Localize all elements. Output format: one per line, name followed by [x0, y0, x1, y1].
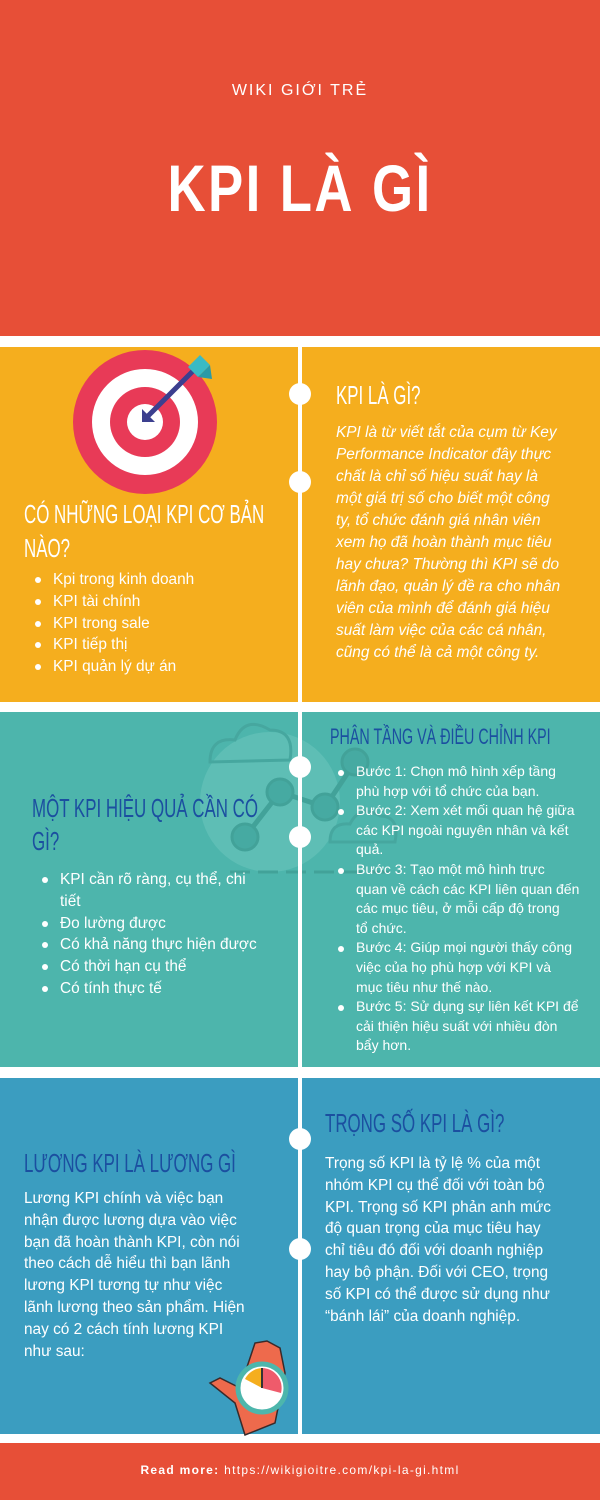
text: lương KPI: nay có 2 cách tính lương KPI — [24, 1321, 223, 1338]
list: steps: phù hợp với tổ chức của bạn. — [356, 783, 539, 799]
list: steps: các KPI ngoài nguyên nhân và kết — [356, 822, 568, 838]
heading: KPI là gì: KPI LÀ GÌ? — [336, 380, 421, 410]
icon: target — [73, 350, 217, 494]
list: loại KPI: Kpi trong kinh doanh — [53, 571, 194, 588]
heading: trọng số: TRỌNG SỐ KPI LÀ GÌ? — [325, 1108, 504, 1138]
list: loại KPI: KPI tài chính — [53, 593, 140, 610]
list: steps: Bước 4: Giúp mọi người thấy công — [356, 939, 572, 955]
list: steps: Bước 5: Sử dụng sự liên kết KPI để — [356, 998, 579, 1014]
text: lương KPI: Lương KPI chính và việc bạn — [24, 1190, 223, 1207]
list: steps: các mục tiêu, ở mỗi cấp độ trong — [356, 900, 560, 916]
list: KPI hiệu quả: Có tính thực tế — [60, 980, 162, 997]
icon: faint cloud network — [200, 723, 400, 874]
text: definition — [335, 423, 560, 661]
heading: lương KPI: LƯƠNG KPI LÀ LƯƠNG GÌ — [24, 1148, 236, 1178]
heading: KPI hiệu quả: MỘT KPI HIỆU QUẢ CẦN CÓ — [32, 793, 258, 823]
text: lương KPI: nhận được lương dựa vào việc — [24, 1212, 237, 1229]
panel: yellow — [0, 347, 600, 702]
header — [0, 0, 600, 336]
list: KPI hiệu quả: Có thời hạn cụ thể — [60, 958, 186, 975]
list: KPI hiệu quả — [42, 871, 257, 997]
list: steps: Bước 2: Xem xét mối quan hệ giữa — [356, 802, 575, 818]
heading: KPI hiệu quả: GÌ? — [32, 826, 59, 856]
list: steps: bẩy hơn. — [356, 1037, 411, 1053]
text: lương KPI: theo cách dễ hiểu thì bạn lãnh — [24, 1255, 230, 1272]
footer — [0, 1443, 600, 1500]
text: definition: viên của mình để đánh giá hiệu — [336, 600, 550, 617]
heading: KPI hiệu quả — [32, 793, 258, 856]
subtitle: WIKI GIỚI TRẺ — [232, 82, 368, 99]
text: trọng số: nhóm KPI cụ thể đối với toàn bộ — [325, 1177, 545, 1194]
title: KPI LÀ GÌ — [167, 151, 433, 225]
text: lương KPI: như sau: — [24, 1343, 85, 1360]
text: trọng số: chỉ tiêu đó đối với doanh nghiệp — [325, 1242, 543, 1259]
list: steps: cải thiện hiệu suất với nhiều đòn — [356, 1018, 557, 1034]
list: steps: mục tiêu như thế nào. — [356, 979, 492, 995]
panel: teal — [0, 712, 600, 1067]
footer link text: Read more: https://wikigioitre.com/kpi-la-gi.html — [140, 1463, 460, 1477]
text: lương KPI: bạn đã hoàn thành KPI, còn nói — [24, 1234, 240, 1251]
text: trọng số: Trọng số KPI là tỷ lệ % của một — [325, 1155, 540, 1172]
list: steps: Bước 1: Chọn mô hình xếp tầng — [356, 763, 556, 779]
list: loại KPI: KPI trong sale — [53, 615, 150, 632]
text: trọng số: hay bộ phận. Đối với CEO, trọng — [325, 1264, 548, 1281]
heading: phân tầng: PHÂN TẦNG VÀ ĐIỀU CHỈNH KPI — [330, 724, 551, 749]
list: KPI hiệu quả: Có khả năng thực hiện được — [60, 936, 257, 953]
list: KPI hiệu quả: KPI cần rõ ràng, cụ thể, chi — [60, 871, 246, 888]
list: steps: Bước 3: Tạo một mô hình trực — [356, 861, 545, 877]
heading: loại KPI: CÓ NHỮNG LOẠI KPI CƠ BẢN — [24, 499, 264, 529]
text: definition: chất là chỉ số hiệu suất hay là — [336, 468, 538, 485]
list: steps: việc của họ phù hợp với KPI và — [356, 959, 551, 975]
text: lương KPI: lãnh lương theo sản phẩm. Hiện — [24, 1299, 245, 1316]
text: trọng số: số KPI có thể được sử dụng như — [325, 1286, 550, 1303]
text: trọng số — [325, 1155, 551, 1325]
text: definition: lãnh đạo, quản lý đề ra cho nhân — [336, 578, 560, 595]
heading: loại KPI: NÀO? — [24, 533, 70, 563]
text: definition: KPI là từ viết tắt của cụm từ Key — [336, 424, 557, 441]
list: loại KPI: KPI quản lý dự án — [53, 658, 176, 675]
text: trọng số: “bánh lái” của doanh nghiệp. — [325, 1308, 520, 1325]
text: definition: cũng có thể là cả một công ty. — [336, 644, 539, 661]
panel: blue — [0, 1078, 600, 1434]
text: trọng số: độ quan trọng của mục tiêu hay — [325, 1220, 541, 1237]
text: definition: hay chưa? Thường thì KPI sẽ do — [336, 556, 559, 573]
list: steps: quả. — [356, 841, 383, 857]
icon: hand with stopwatch — [208, 1340, 288, 1436]
list: steps: tổ chức. — [356, 920, 407, 936]
list: KPI hiệu quả: Đo lường được — [60, 915, 166, 932]
list: steps — [338, 763, 579, 1053]
text: lương KPI — [24, 1190, 245, 1360]
heading: loại KPI — [24, 499, 264, 563]
timeline dots — [289, 383, 311, 1260]
list: KPI hiệu quả: tiết — [60, 893, 81, 910]
list: loại KPI — [35, 571, 194, 675]
text: definition: suất làm việc của các cá nhân, — [336, 622, 546, 639]
list: loại KPI: KPI tiếp thị — [53, 636, 127, 653]
text: lương KPI: lương KPI tương tự như việc — [24, 1277, 222, 1294]
text: definition: một giá trị số cho biết một công — [336, 490, 550, 507]
list: steps: quan về cách các KPI liên quan đến — [356, 881, 579, 897]
text: definition: xem họ đã hoàn thành mục tiêu — [336, 534, 552, 551]
text: trọng số: KPI. Trọng số KPI phản anh mức — [325, 1199, 551, 1216]
text: definition: ty, tổ chức đánh giá nhân viên — [336, 512, 541, 529]
text: definition: Performance Indicator đây thực — [336, 446, 551, 463]
